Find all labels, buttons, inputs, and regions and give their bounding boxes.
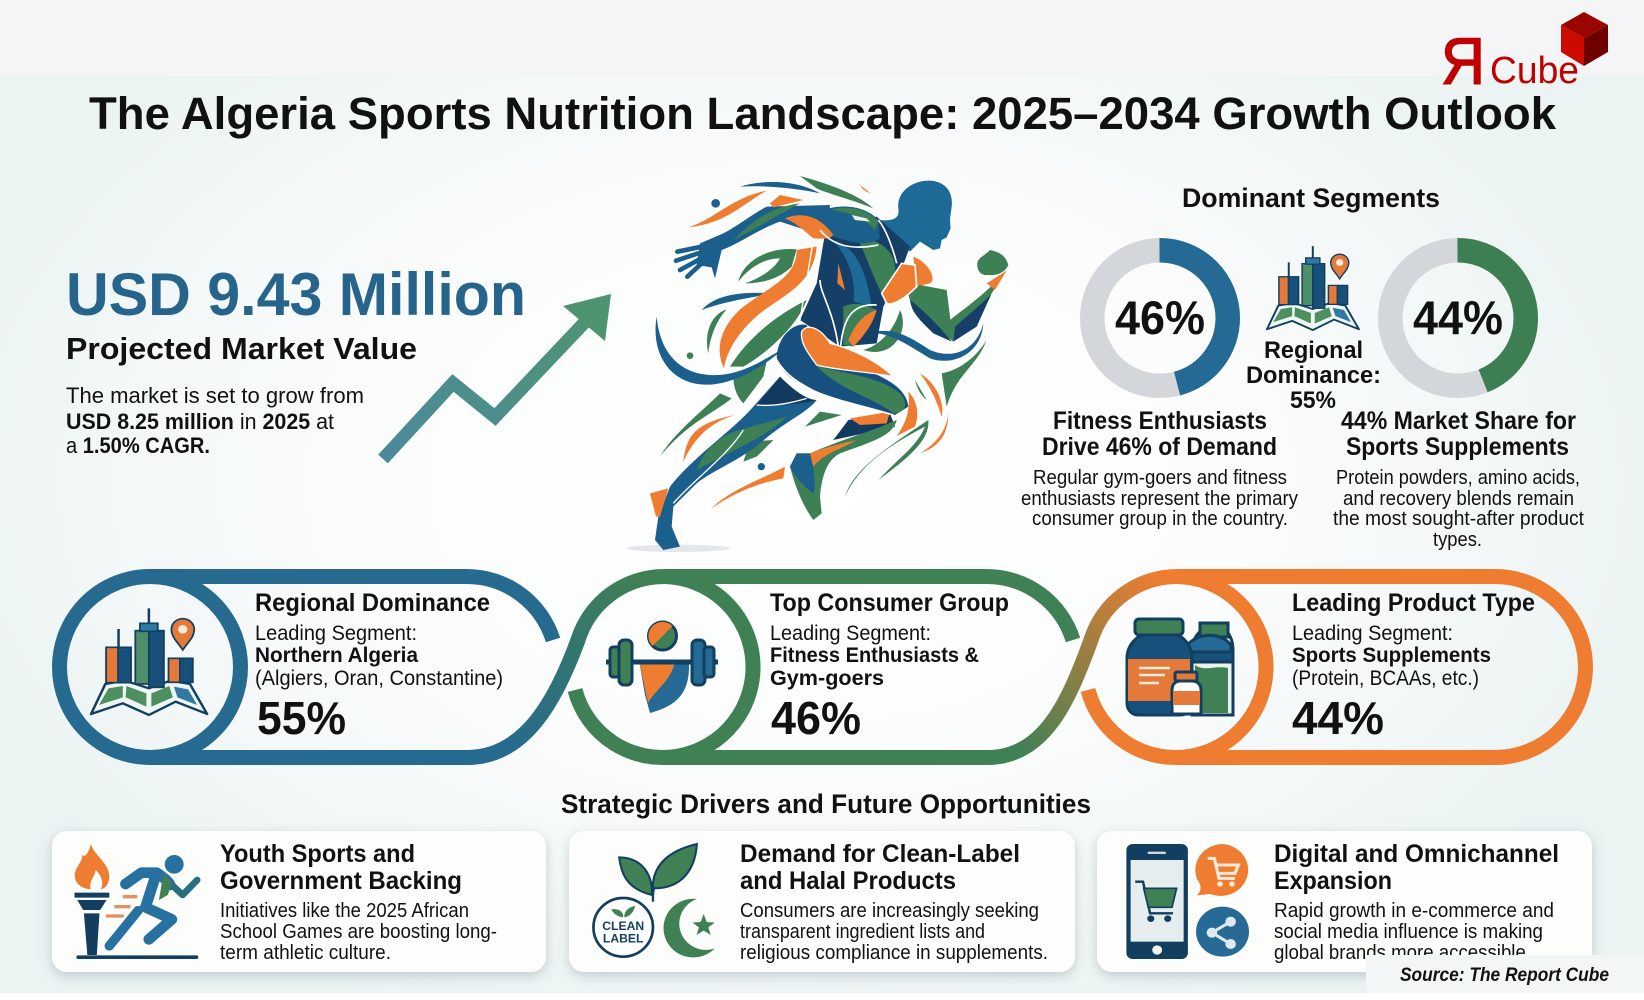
donut: 44 percent: 44%	[1413, 291, 1503, 344]
market growth description: USD 8.25 million in 2025 at	[66, 409, 334, 434]
clean label body: Consumers are increasingly seeking	[740, 900, 1039, 922]
segment text: fitness enthusiasts: Fitness Enthusiasts	[1053, 407, 1267, 435]
segment text: fitness enthusiasts: consumer group in the country.	[1032, 508, 1288, 530]
runner torso	[785, 207, 910, 347]
segment text: fitness enthusiasts	[1021, 407, 1298, 530]
product details: Leading Segment:	[1292, 622, 1453, 645]
icon: city map small	[1267, 246, 1359, 330]
ribbon connector: green to orange	[987, 576, 1177, 758]
runner back arm	[676, 195, 830, 278]
digital body: Rapid growth in e-commerce and	[1274, 900, 1554, 922]
market growth description	[66, 383, 364, 458]
clean label body	[740, 900, 1048, 964]
donut: 46 percent	[1092, 250, 1228, 386]
clean label heading	[740, 840, 1020, 895]
segment text: sports supplements: 44% Market Share for	[1341, 407, 1576, 435]
digital heading	[1274, 840, 1559, 895]
icon: phone cart share	[1126, 844, 1249, 959]
segment text: sports supplements: Protein powders, amino acids,	[1336, 467, 1580, 489]
market value block	[66, 261, 526, 458]
icon: supplement jars	[1127, 619, 1233, 715]
consumer details: Leading Segment:	[770, 622, 931, 645]
clean label body: transparent ingredient lists and	[740, 921, 985, 943]
regional details: Leading Segment:	[255, 622, 417, 645]
digital body: social media influence is making	[1274, 921, 1543, 943]
digital heading: Digital and Omnichannel	[1274, 840, 1559, 868]
regional details	[255, 622, 503, 690]
youth sports heading: Youth Sports and	[220, 840, 415, 868]
regional heading: Regional Dominance	[255, 589, 490, 617]
consumer value: 46%	[771, 692, 861, 744]
consumer details	[770, 622, 979, 690]
runner back leg	[650, 377, 817, 550]
segment text: sports supplements: the most sought-after product	[1333, 508, 1584, 530]
donut: 44 percent	[1390, 250, 1526, 386]
product value: 44%	[1292, 692, 1384, 744]
title: The Algeria Sports Nutrition Landscape: 2025–2034 Growth Outlook	[89, 88, 1557, 139]
regional dominance label: Regional	[1264, 337, 1363, 364]
donut: 46 percent: 46%	[1115, 291, 1205, 344]
runner front leg	[777, 324, 917, 520]
clean label heading: and Halal Products	[740, 867, 956, 895]
heading: strategic drivers: Strategic Drivers and Future Opportunities	[561, 789, 1091, 819]
regional dominance label	[1246, 337, 1381, 414]
segment text: sports supplements: and recovery blends remain	[1343, 488, 1574, 510]
segment text: sports supplements: Sports Supplements	[1346, 433, 1569, 461]
product details: Sports Supplements	[1292, 644, 1491, 667]
product heading: Leading Product Type	[1292, 589, 1535, 617]
regional value: 55%	[257, 692, 346, 744]
headline value: USD 9.43 Million	[66, 261, 526, 328]
youth sports body: School Games are boosting long-	[220, 921, 497, 943]
runner head	[878, 181, 952, 252]
youth sports body: term athletic culture.	[220, 942, 391, 964]
digital body: global brands more accessible.	[1274, 942, 1531, 964]
digital body	[1274, 900, 1554, 964]
arrow: growth trend	[383, 294, 611, 459]
logo: RCube: Cube	[1490, 50, 1579, 92]
source note	[1366, 955, 1644, 993]
product details: (Protein, BCAAs, etc.)	[1292, 667, 1479, 690]
icon: torch and runner	[74, 844, 198, 959]
logo: RCube	[1441, 12, 1608, 98]
market growth description: a 1.50% CAGR.	[66, 433, 210, 458]
card: digital omnichannel	[1097, 831, 1592, 972]
icon: barbell athlete	[606, 622, 718, 713]
youth sports body	[220, 900, 497, 964]
consumer details: Fitness Enthusiasts &	[770, 644, 979, 667]
regional dominance label: 55%	[1290, 387, 1336, 414]
card: clean label	[569, 831, 1075, 972]
card: youth sports	[52, 831, 546, 972]
logo: RCube: Я	[1441, 24, 1485, 98]
panel: regional dominance	[60, 576, 553, 758]
regional details: (Algiers, Oran, Constantine)	[255, 667, 503, 690]
headline subtitle: Projected Market Value	[66, 331, 417, 366]
consumer details: Gym-goers	[770, 667, 884, 690]
icon: leaves clean label crescent: LABEL	[603, 932, 643, 946]
segment text: fitness enthusiasts: Regular gym-goers and fitness	[1033, 467, 1287, 489]
panel: top consumer group	[575, 576, 1073, 758]
market growth description: The market is set to grow from	[66, 383, 364, 408]
youth sports body: Initiatives like the 2025 African	[220, 900, 469, 922]
segment text: fitness enthusiasts: enthusiasts represent the primary	[1021, 488, 1298, 510]
heading: dominant segments: Dominant Segments	[1182, 183, 1440, 213]
clean label body: religious compliance in supplements.	[740, 942, 1048, 964]
panel: leading product type	[1088, 576, 1586, 758]
clean label heading: Demand for Clean-Label	[740, 840, 1020, 868]
regional dominance label: Dominance:	[1246, 362, 1381, 389]
consumer heading: Top Consumer Group	[770, 589, 1009, 617]
icon: city map	[91, 608, 207, 715]
source note: Source: The Report Cube	[1400, 965, 1609, 986]
segment text: sports supplements: types.	[1433, 529, 1482, 551]
runner front arm	[882, 250, 1008, 342]
segment text: fitness enthusiasts: Drive 46% of Demand	[1042, 433, 1277, 461]
icon: leaves clean label crescent	[593, 844, 715, 957]
icon: leaves clean label crescent: CLEAN	[602, 919, 644, 933]
youth sports heading	[220, 840, 462, 895]
product details	[1292, 622, 1491, 690]
segment text: sports supplements	[1333, 407, 1584, 551]
digital heading: Expansion	[1274, 867, 1392, 895]
regional details: Northern Algeria	[255, 644, 418, 667]
ribbon connector: blue to green	[467, 576, 664, 758]
youth sports heading: Government Backing	[220, 867, 462, 895]
icon: stylised runner	[627, 176, 1008, 552]
